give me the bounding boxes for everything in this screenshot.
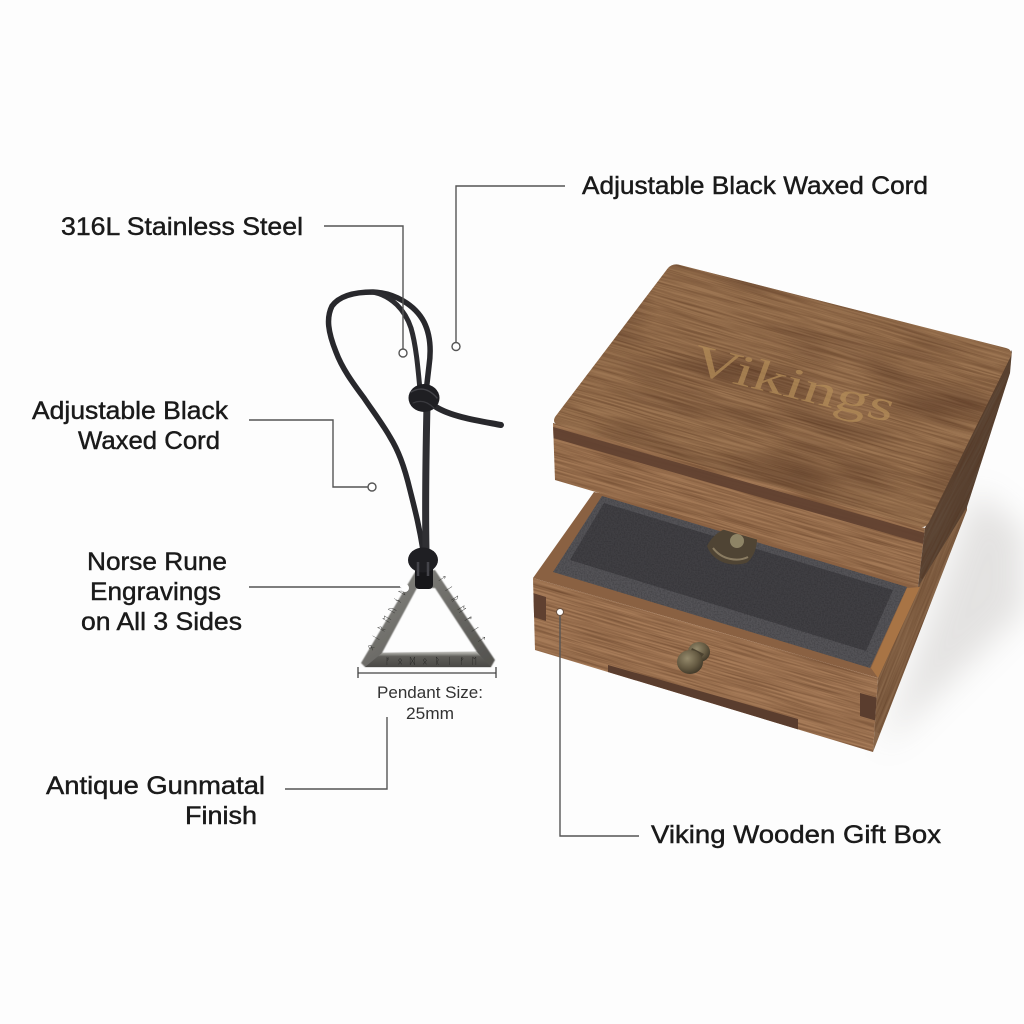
lid front bbox=[553, 423, 925, 586]
engraved lid lettering: Vikings bbox=[685, 335, 903, 432]
cord tail bbox=[436, 407, 501, 425]
box shadow bbox=[880, 490, 1024, 750]
cord inner strand bbox=[373, 292, 420, 390]
pendant size dimension line bbox=[358, 667, 496, 678]
rune engravings: ᛟᛁᚱᛖᚢᚾᛞ bbox=[365, 586, 410, 652]
label: left cord: Adjustable Black bbox=[32, 397, 229, 425]
lid side bbox=[918, 350, 1012, 586]
label: pendant size: Pendant Size: bbox=[377, 683, 483, 702]
label: gift box: Viking Wooden Gift Box bbox=[651, 821, 942, 849]
triangle pendant bbox=[361, 548, 495, 667]
label: pendant size: 25mm bbox=[406, 704, 454, 723]
dovetail joints bbox=[533, 593, 546, 621]
wooden gift box bbox=[533, 264, 1012, 752]
callout lines bbox=[249, 186, 639, 836]
label: gunmetal finish bbox=[46, 772, 265, 830]
callout line: gift box bbox=[556, 608, 639, 836]
velvet cushion bbox=[550, 490, 910, 670]
box front bbox=[533, 578, 878, 752]
upper knot bbox=[408, 384, 440, 412]
label: top cord: Adjustable Black Waxed Cord bbox=[582, 172, 928, 200]
callout line: gunmetal finish bbox=[285, 717, 387, 789]
box interior rim bbox=[533, 492, 920, 678]
box side bbox=[871, 507, 967, 752]
label: rune engravings: Engravings bbox=[90, 578, 221, 606]
label: left cord bbox=[32, 397, 229, 455]
label: rune engravings: Norse Rune bbox=[87, 548, 227, 576]
cord outer strand bbox=[329, 292, 430, 550]
cord lower strand bbox=[426, 405, 427, 550]
rune engravings: ᚠᛟᛞᛟᚱᛁᚠᛖ bbox=[385, 656, 477, 667]
clasp inner bbox=[707, 527, 757, 564]
rune engravings: ᛏᛁᚱᛖᚠᛁᛏ bbox=[435, 574, 487, 645]
label: stainless steel: 316L Stainless Steel bbox=[61, 213, 303, 241]
label: gunmetal finish: Antique Gunmatal bbox=[46, 772, 265, 800]
callout line: top waxed cord bbox=[452, 186, 565, 350]
label: gunmetal finish: Finish bbox=[185, 802, 257, 830]
rune engravings bbox=[365, 574, 487, 667]
callout line: stainless steel bbox=[324, 226, 407, 357]
label: left cord: Waxed Cord bbox=[78, 427, 220, 455]
callout line: rune engravings bbox=[249, 584, 409, 592]
lid top bbox=[554, 264, 1012, 528]
label: rune engravings bbox=[81, 548, 242, 636]
label: rune engravings: on All 3 Sides bbox=[81, 608, 242, 636]
cord necklace bbox=[329, 292, 501, 550]
lower knot and wrap bbox=[408, 548, 438, 589]
label: pendant size bbox=[377, 683, 483, 723]
box knob bbox=[677, 642, 710, 674]
callout line: left waxed cord bbox=[249, 420, 376, 491]
bottom bar bbox=[365, 652, 491, 667]
